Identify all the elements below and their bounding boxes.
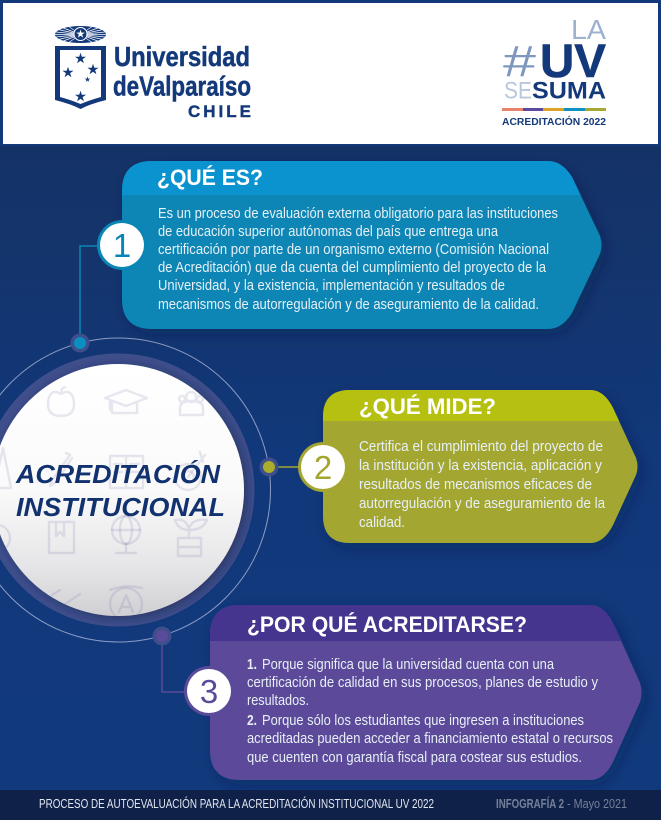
panel: qué mide [298, 390, 638, 543]
panel: por qué acreditarse [184, 605, 642, 780]
logo: #UV Se Suma: UV [540, 34, 607, 87]
footer title: PROCESO DE AUTOEVALUACIÓN PARA LA ACREDITACIÓN INSTITUCIONAL UV 2022 [39, 796, 434, 811]
heading: por qué acreditarse: ¿POR QUÉ ACREDITARSE? [247, 612, 527, 637]
logo: #UV Se Suma: LA [571, 14, 606, 45]
faint education icons [0, 387, 207, 620]
logo: #UV Se Suma: ACREDITACIÓN 2022 [502, 115, 606, 128]
text block: qué mide: Certifica el cumplimiento del proyecto de [359, 438, 603, 455]
text block: por qué acreditarse: acreditadas pueden acceder a financiamiento estatal o recursos [247, 730, 613, 747]
logo: #UV Se Suma: SE [504, 78, 532, 105]
panel: qué es [97, 161, 602, 329]
text block: por qué acreditarse: que cuenten con garantía fiscal para costear sus estudios. [247, 749, 582, 766]
text block: por qué acreditarse [247, 656, 613, 766]
node dot 1 [70, 334, 90, 352]
university name: Universidad [114, 41, 250, 72]
footer issue: - Mayo 2021 [567, 797, 627, 811]
text block: por qué acreditarse: 1. [247, 656, 257, 673]
number badge 2 [298, 442, 348, 492]
logo: #UV Se Suma [502, 14, 607, 128]
text block: qué mide: calidad. [359, 514, 405, 531]
circle title: INSTITUCIONAL [16, 492, 225, 522]
logo: #UV Se Suma: # [503, 37, 537, 86]
text block: qué mide [359, 438, 606, 531]
text block: qué mide: la institución y la existencia, aplicación y [359, 457, 602, 474]
university name: CHILE [188, 102, 251, 121]
text block: qué mide: autorregulación y de aseguramiento de la [359, 495, 606, 512]
connector 2 [269, 466, 300, 468]
circle title [15, 459, 225, 522]
icon: radiant star crest [55, 26, 106, 43]
number badge 3 [184, 666, 234, 716]
university name: deValparaíso [113, 70, 251, 102]
number badge 1 [97, 220, 147, 270]
text block: por qué acreditarse: 2. [247, 712, 257, 729]
footer issue: INFOGRAFÍA 2 [496, 796, 564, 811]
circle title: ACREDITACIÓN [15, 459, 221, 489]
logo: Universidad de Valparaíso [55, 26, 251, 121]
text block: por qué acreditarse: Porque sólo los estudiantes que ingresen a instituciones [262, 712, 584, 729]
heading: qué es: ¿QUÉ ES? [157, 165, 263, 190]
heading: qué mide: ¿QUÉ MIDE? [359, 394, 496, 419]
text block: qué es: Es un proceso de evaluación externa obligatorio para las instituciones [158, 205, 558, 222]
number badge 1: 1 [113, 227, 131, 264]
text block: qué es: de educación superior autónomas del país que entrega una [158, 223, 499, 240]
number badge 3: 3 [200, 673, 218, 710]
icon: shield with stars [55, 46, 106, 109]
central circle: Acreditación Institucional [0, 338, 270, 642]
university name [113, 41, 251, 121]
node dot 3 [152, 626, 172, 646]
text block: qué es: de Acreditación) que da cuenta del cumplimiento del proyecto de la [158, 259, 547, 276]
text block: por qué acreditarse: resultados. [247, 692, 309, 709]
header band [0, 0, 661, 146]
text block: por qué acreditarse: certificación de calidad en sus procesos, planes de estudio y [247, 674, 598, 691]
node dot 2 [260, 458, 278, 476]
number badge 2: 2 [314, 449, 332, 486]
connector 3 [162, 636, 186, 692]
text block: qué mide: resultados de mecanismos eficaces de [359, 476, 592, 493]
connector 1 [80, 246, 100, 343]
logo: #UV Se Suma: SUMA [532, 78, 606, 105]
footer issue [496, 796, 627, 811]
text block: qué es: Universidad, y la existencia, implementación y resultados de [158, 277, 505, 294]
text block: qué es [158, 205, 558, 313]
text block: qué es: mecanismos de autorregulación y de aseguramiento de la calidad. [158, 296, 539, 313]
footer [0, 790, 661, 820]
text block: qué es: certificación por parte de un organismo externo (Comisión Nacional [158, 241, 549, 258]
text block: por qué acreditarse: Porque significa que la universidad cuenta con una [262, 656, 555, 673]
